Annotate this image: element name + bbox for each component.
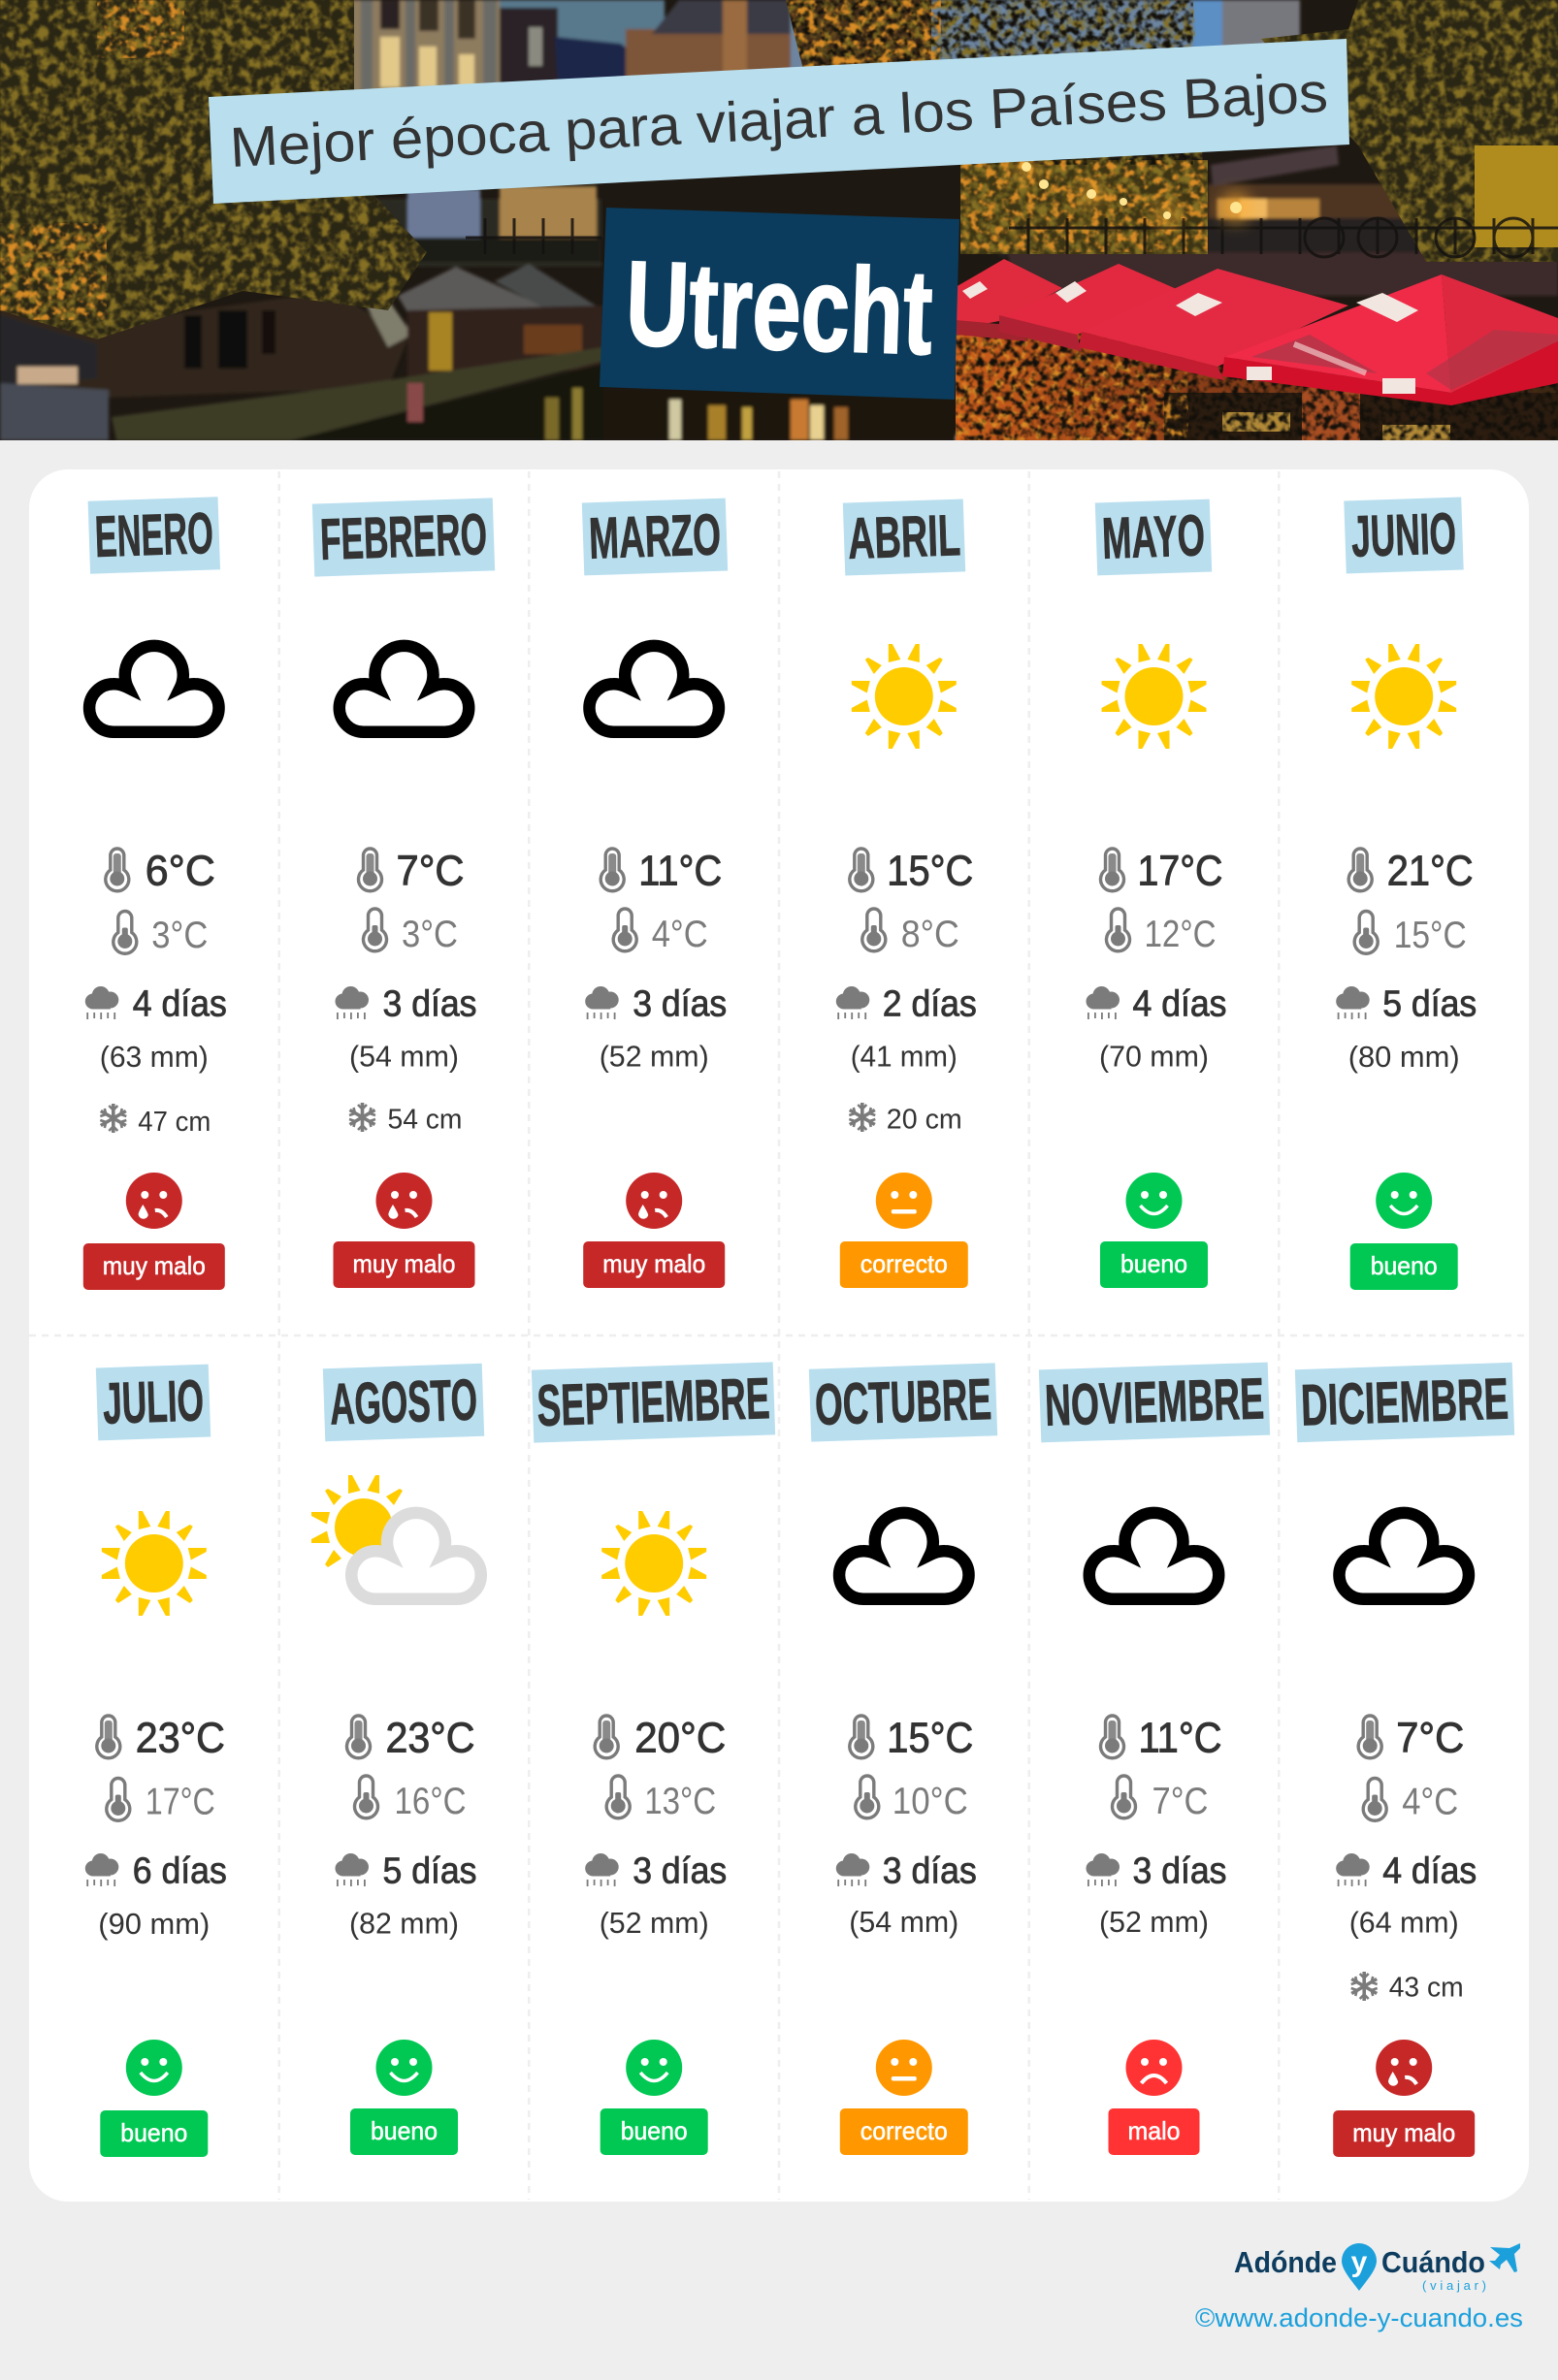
rainfall: (54 mm) — [849, 1905, 958, 1939]
heading: agosto — [323, 1364, 484, 1441]
month: septiembre — [532, 1362, 775, 2155]
rainy days — [1336, 983, 1477, 1024]
rainy days — [336, 983, 477, 1024]
footer logo: Adónde y Cuándo: Adónde — [1234, 2245, 1337, 2279]
snowfall: 20 cm — [887, 1104, 962, 1135]
rating badge — [840, 1241, 968, 1288]
max temperature: 17°C — [1137, 848, 1222, 895]
rating badge — [334, 1241, 475, 1288]
min temperature: 10°C — [893, 1781, 968, 1822]
footer website: ©www.adonde-y-cuando.es — [1195, 2303, 1523, 2332]
month: abril — [836, 499, 977, 1288]
min temperature: 3°C — [402, 914, 458, 955]
heading: marzo — [582, 499, 728, 575]
snowfall: 43 cm — [1389, 1973, 1464, 2004]
rainy days: 5 días — [382, 1850, 477, 1891]
month: octubre — [809, 1363, 997, 2155]
rainy days: 6 días — [133, 1850, 227, 1891]
rating badge: muy malo — [353, 1249, 456, 1278]
snowfall — [349, 1103, 462, 1135]
min temperature: 13°C — [644, 1781, 716, 1822]
max temperature: 23°C — [136, 1715, 225, 1762]
rainy days — [1087, 1850, 1226, 1891]
icon: plane — [1489, 2243, 1520, 2272]
rating badge — [600, 2108, 708, 2155]
max temperature — [97, 1715, 225, 1762]
title banner: Mejor época para viajar a los Países Bajos — [228, 61, 1329, 179]
rating badge — [1108, 2108, 1199, 2155]
rating face — [626, 2040, 682, 2096]
footer logo: Adónde y Cuándo: Cuándo — [1381, 2245, 1485, 2279]
min temperature — [1354, 912, 1467, 956]
min temperature: 7°C — [1152, 1781, 1209, 1822]
rating face — [876, 2040, 932, 2096]
rating badge — [1100, 1241, 1208, 1288]
rainy days — [836, 983, 977, 1024]
rainy days — [336, 1850, 477, 1891]
rating face — [376, 1173, 433, 1229]
rating badge: muy malo — [1352, 2118, 1455, 2147]
city name: Utrecht: Utrecht — [624, 237, 934, 380]
snowfall: 54 cm — [388, 1104, 462, 1135]
rating badge — [583, 1241, 725, 1288]
rating badge: bueno — [1120, 1249, 1187, 1278]
min temperature — [862, 909, 959, 955]
min temperature — [1363, 1779, 1458, 1823]
max temperature — [600, 848, 722, 895]
rating badge: bueno — [120, 2118, 187, 2147]
rating badge — [83, 1243, 225, 1290]
heading: enero — [88, 497, 220, 574]
heading: julio — [96, 1365, 211, 1440]
red umbrellas — [956, 259, 1558, 405]
max temperature — [1348, 848, 1474, 895]
rainy days — [1336, 1850, 1477, 1891]
month: marzo — [582, 499, 728, 1288]
month: agosto — [311, 1364, 484, 2155]
rating badge: correcto — [860, 1249, 948, 1278]
rating face — [626, 1173, 682, 1229]
max temperature: 7°C — [396, 848, 464, 895]
rainfall: (64 mm) — [1349, 1905, 1459, 1940]
rating badge: muy malo — [103, 1251, 206, 1280]
header photo: Utrecht canal at dusk — [0, 0, 1558, 440]
icon: map pin with y — [1342, 2243, 1377, 2291]
heading: febrero: FEBRERO — [319, 501, 488, 572]
min temperature — [107, 1779, 215, 1823]
max temperature — [347, 1715, 475, 1762]
icon: sun — [1102, 644, 1207, 749]
rainfall: (54 mm) — [349, 1040, 459, 1073]
rating badge: bueno — [621, 2116, 688, 2145]
rating face — [1376, 2040, 1432, 2096]
max temperature: 20°C — [634, 1715, 726, 1762]
rating face — [126, 2040, 182, 2096]
rating badge: muy malo — [602, 1249, 705, 1278]
heading: mayo: MAYO — [1101, 502, 1206, 571]
min temperature — [355, 1776, 466, 1822]
rainfall: (52 mm) — [600, 1906, 709, 1940]
min temperature — [1106, 909, 1217, 955]
min temperature: 17°C — [146, 1781, 215, 1823]
rainy days: 4 días — [1382, 1850, 1477, 1891]
max temperature — [1358, 1715, 1464, 1762]
footer logo: Adónde y Cuándo: (viajar) — [1422, 2278, 1486, 2293]
icon: sun behind cloud — [311, 1475, 481, 1599]
snowfall — [849, 1103, 962, 1135]
max temperature: 15°C — [887, 1715, 973, 1762]
rainy days — [836, 1850, 977, 1891]
snowfall — [100, 1104, 211, 1138]
rainfall: (63 mm) — [100, 1040, 209, 1074]
heading: septiembre: SEPTIEMBRE — [536, 1366, 771, 1438]
rating badge: bueno — [371, 2116, 438, 2145]
icon: cloud — [340, 646, 469, 732]
max temperature: 11°C — [638, 848, 722, 895]
icon: sun — [601, 1511, 706, 1616]
rainfall: (52 mm) — [600, 1040, 709, 1073]
icon: sun — [102, 1511, 207, 1616]
month: diciembre — [1295, 1363, 1514, 2157]
max temperature — [106, 848, 215, 895]
rainy days: 3 días — [382, 983, 477, 1024]
max temperature: 23°C — [386, 1715, 475, 1762]
heading: septiembre — [532, 1362, 775, 1443]
rating face — [376, 2040, 433, 2096]
rainy days: 3 días — [633, 983, 727, 1024]
min temperature — [606, 1776, 716, 1822]
rainy days — [85, 983, 227, 1024]
heading: mayo — [1095, 499, 1212, 575]
min temperature — [1112, 1776, 1209, 1822]
heading: junio: JUNIO — [1350, 500, 1457, 569]
snowfall — [1351, 1972, 1464, 2004]
rainfall: (90 mm) — [98, 1907, 210, 1941]
rating face — [126, 1173, 182, 1229]
heading: febrero — [312, 498, 495, 577]
rainfall: (80 mm) — [1348, 1040, 1460, 1074]
panel: monthly calendar — [29, 469, 1529, 2202]
icon: sun — [852, 644, 957, 749]
rating badge — [1350, 1243, 1458, 1290]
heading: noviembre — [1039, 1363, 1270, 1442]
min temperature: 12°C — [1145, 914, 1217, 955]
heading: noviembre: NOVIEMBRE — [1044, 1366, 1265, 1438]
heading: agosto: AGOSTO — [329, 1367, 478, 1437]
rainy days — [1087, 983, 1226, 1024]
heading: octubre: OCTUBRE — [814, 1367, 992, 1437]
rating badge — [350, 2108, 458, 2155]
foliage — [0, 0, 1558, 339]
rating badge: bueno — [1371, 1251, 1438, 1280]
icon: cloud — [1339, 1513, 1469, 1599]
icon: cloud — [839, 1513, 969, 1599]
max temperature — [850, 1715, 973, 1762]
month: junio — [1336, 498, 1477, 1290]
month: enero — [83, 497, 227, 1290]
min temperature — [363, 909, 458, 955]
min temperature: 8°C — [901, 914, 959, 955]
rainy days: 4 días — [1133, 983, 1226, 1024]
min temperature: 15°C — [1394, 915, 1467, 956]
max temperature — [1100, 1715, 1222, 1762]
icon: cloud — [589, 646, 719, 732]
max temperature: 11°C — [1139, 1715, 1222, 1762]
icon: map pin with y: y — [1351, 2246, 1368, 2278]
min temperature: 3°C — [151, 915, 208, 956]
max temperature — [850, 848, 973, 895]
min temperature — [114, 912, 208, 956]
rainfall: (41 mm) — [851, 1040, 958, 1073]
month: julio — [85, 1365, 227, 2157]
streetlights — [1015, 155, 1251, 227]
month: mayo — [1087, 499, 1226, 1288]
max temperature — [595, 1715, 726, 1762]
rating badge — [840, 2108, 968, 2155]
heading: abril: ABRIL — [847, 502, 961, 571]
rainy days: 5 días — [1382, 983, 1477, 1024]
crowd under umbrellas — [956, 330, 1558, 440]
rating face — [1125, 2040, 1182, 2096]
rainfall: (70 mm) — [1099, 1040, 1209, 1073]
rating badge: malo — [1127, 2116, 1180, 2145]
heading: enero: ENERO — [94, 500, 214, 569]
rainy days: 3 días — [633, 1850, 727, 1891]
min temperature: 4°C — [652, 914, 708, 955]
min temperature: 16°C — [394, 1781, 466, 1822]
heading: abril — [843, 499, 965, 576]
min temperature — [613, 909, 708, 955]
icon: cloud — [89, 646, 219, 732]
bicycle railing — [466, 218, 1558, 257]
rainy days: 3 días — [883, 1850, 977, 1891]
month: febrero — [312, 498, 495, 1288]
max temperature — [1100, 848, 1222, 895]
heading: octubre — [809, 1363, 997, 1442]
rating badge: correcto — [860, 2116, 948, 2145]
snowfall: 47 cm — [138, 1107, 211, 1138]
rainy days — [85, 1850, 227, 1891]
rating face — [876, 1173, 932, 1229]
rainfall: (82 mm) — [349, 1907, 459, 1940]
rainy days — [585, 1850, 727, 1891]
title banner — [209, 39, 1349, 204]
max temperature: 15°C — [887, 848, 973, 895]
heading: julio: JULIO — [102, 1367, 205, 1436]
rainfall: (52 mm) — [1099, 1905, 1209, 1939]
heading: marzo: MARZO — [588, 501, 722, 571]
rainy days — [585, 983, 727, 1024]
rating face — [1125, 1173, 1182, 1229]
month: noviembre — [1039, 1363, 1270, 2155]
icon: cloud — [1089, 1513, 1218, 1599]
rating face — [1376, 1173, 1432, 1229]
min temperature — [856, 1776, 968, 1822]
footer logo: Adónde y Cuándo — [1234, 2243, 1520, 2293]
min temperature: 4°C — [1402, 1781, 1458, 1823]
rainy days: 2 días — [883, 983, 977, 1024]
icon: sun — [1351, 644, 1456, 749]
max temperature — [359, 848, 464, 895]
rainy days: 4 días — [133, 983, 227, 1024]
rating badge — [100, 2110, 208, 2157]
max temperature: 6°C — [146, 848, 215, 895]
max temperature: 21°C — [1387, 848, 1474, 895]
city name: Utrecht — [600, 208, 959, 400]
heading: junio — [1344, 498, 1464, 573]
max temperature: 7°C — [1396, 1715, 1464, 1762]
rating badge — [1333, 2110, 1475, 2157]
rainy days: 3 días — [1133, 1850, 1226, 1891]
